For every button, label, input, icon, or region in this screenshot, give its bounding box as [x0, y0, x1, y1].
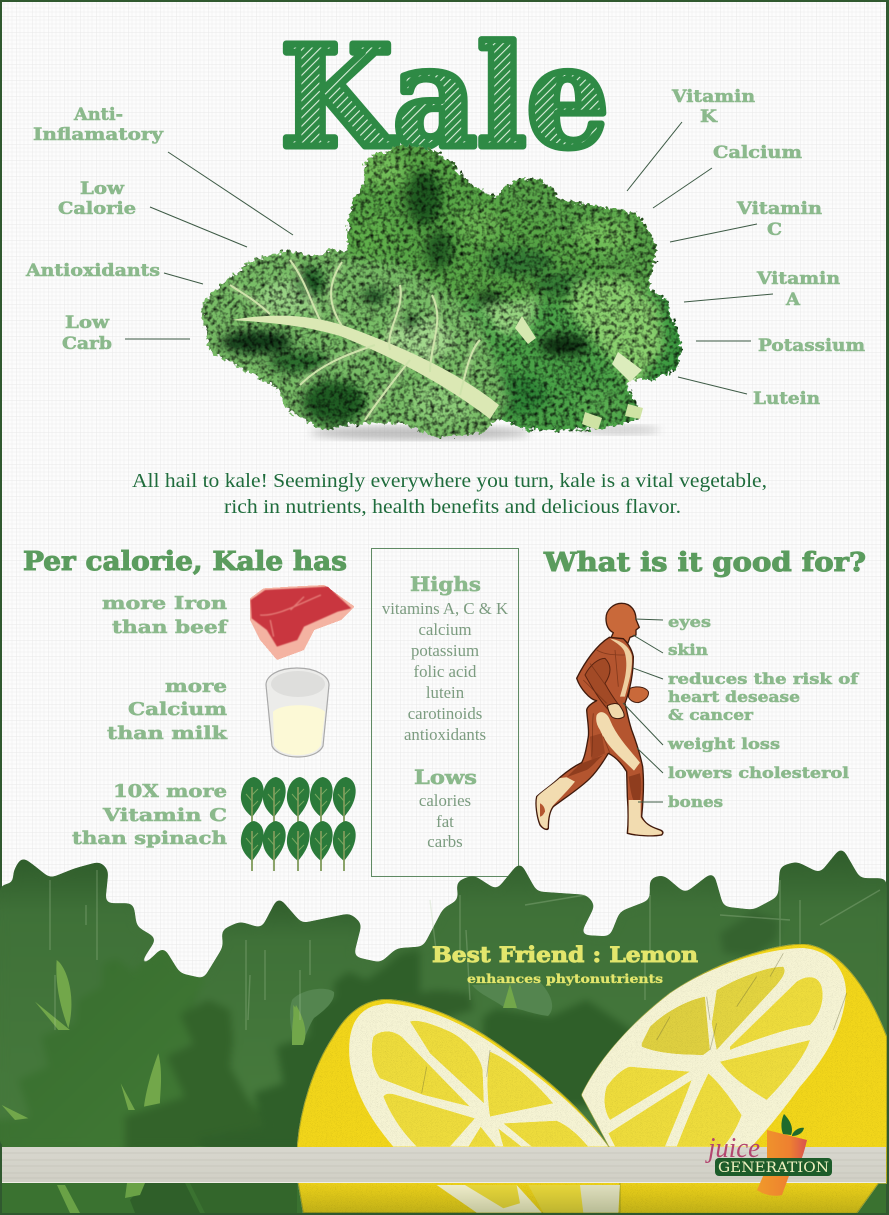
spinach comparison text: than spinach: [72, 828, 227, 849]
calcium comparison text: Calcium: [128, 699, 227, 720]
nutrient labels right of kale: A: [785, 290, 801, 310]
kale bunch illustration: [200, 145, 683, 440]
benefit labels left of kale: [25, 105, 293, 354]
spinach comparison text: 10X more: [113, 781, 227, 802]
calcium comparison text: [107, 676, 228, 744]
juice wordmark: juice: [704, 1132, 760, 1164]
nutrient labels right of kale: Vitamin: [756, 269, 840, 289]
nutrient labels right of kale: C: [767, 220, 782, 240]
benefit labels left of kale: Calorie: [58, 199, 136, 219]
nutrient labels right of kale: Potassium: [758, 336, 865, 356]
nutrient labels right of kale: Vitamin: [671, 87, 755, 107]
nutrient labels right of kale: Lutein: [753, 389, 820, 409]
callout: best friend lemon: Best Friend : Lemon: [432, 942, 698, 967]
list of highs: folic acid: [414, 662, 477, 681]
nutrient labels right of kale: K: [700, 107, 718, 127]
list of highs: vitamins A, C & K: [382, 599, 508, 618]
below-bar leaf parts: [57, 1183, 297, 1213]
right lemon half: [582, 944, 887, 1213]
leaf scratches: [50, 870, 880, 1030]
generation badge: [715, 1158, 832, 1176]
list of highs: calcium: [418, 620, 472, 639]
panel: per calorie comparison: [23, 547, 356, 871]
icon: glass of milk: [266, 668, 329, 757]
heading: Lows: Lows: [414, 765, 477, 789]
running man anatomy figure: [536, 603, 663, 836]
list of highs: antioxidants: [404, 725, 486, 744]
icon: lemon halves: [297, 944, 887, 1213]
illustrated kale leaves background: [0, 847, 887, 1213]
benefit list: skin: [668, 641, 708, 659]
list of lows: calories: [419, 791, 471, 810]
list of highs: lutein: [426, 683, 465, 702]
bottom frame: [0, 1213, 889, 1215]
grass blades: [2, 960, 517, 1120]
benefit list: bones: [668, 793, 723, 811]
lemon below shelf: [437, 1185, 620, 1213]
benefit list: [667, 613, 860, 811]
icon: beef steak: [250, 585, 355, 660]
calcium comparison text: more: [165, 676, 227, 697]
pointer lines: [623, 619, 663, 802]
shelf bar: [2, 1147, 886, 1183]
benefit labels left of kale: Antioxidants: [25, 261, 160, 281]
spinach comparison text: Vitamin C: [102, 805, 227, 826]
panel: what is it good for: [536, 548, 866, 836]
panel: highs and lows: [372, 548, 518, 876]
list of highs: potassium: [411, 641, 479, 660]
lemon shadow below shelf: [298, 1183, 878, 1213]
benefit list: lowers cholesterol: [668, 764, 849, 782]
nutrient labels right of kale: Vitamin: [736, 199, 822, 219]
intro text: rich in nutrients, health benefits and delicious flavor.: [224, 496, 681, 518]
title: Kale: Kale: [280, 16, 609, 180]
benefit list: heart desease: [668, 688, 800, 706]
calcium comparison text: than milk: [107, 723, 228, 744]
benefit labels left of kale: Low: [65, 313, 109, 333]
intro text: [132, 470, 767, 518]
benefit labels left of kale: Low: [80, 179, 124, 199]
left lemon half: [297, 999, 620, 1213]
benefit labels left of kale: Carb: [62, 334, 112, 354]
icon: cup leaves: [781, 1114, 804, 1136]
iron comparison text: than beef: [112, 617, 229, 638]
benefit labels left of kale: Inflamatory: [33, 125, 164, 145]
icon: spinach leaves: [241, 777, 356, 871]
spinach comparison text: [72, 781, 227, 849]
benefit labels left of kale: Anti-: [73, 105, 123, 125]
nutrient labels right of kale: Calcium: [713, 143, 802, 163]
heading: What is it good for?: What is it good for?: [543, 548, 866, 578]
heading: Per calorie, Kale has: Per calorie, Kale has: [23, 547, 347, 577]
benefit list: eyes: [668, 613, 711, 631]
list of lows: [419, 791, 471, 851]
iron comparison text: more Iron: [102, 593, 227, 614]
benefit list: weight loss: [667, 735, 780, 753]
list of lows: carbs: [427, 832, 463, 851]
generation wordmark: GENERATION: [718, 1160, 829, 1176]
list of highs: carotinoids: [408, 704, 482, 723]
benefit list: & cancer: [668, 706, 754, 724]
list of highs: [382, 599, 508, 744]
intro text: All hail to kale! Seemingly everywhere you turn, kale is a vital vegetable,: [132, 470, 767, 492]
heading: Highs: Highs: [410, 572, 481, 596]
nutrient labels right of kale: [627, 87, 865, 409]
icon: orange juice cup: [757, 1130, 807, 1196]
benefit list: reduces the risk of: [668, 670, 860, 688]
iron comparison text: [102, 593, 229, 638]
callout: best friend lemon: [432, 942, 698, 986]
logo: Juice Generation: [704, 1114, 832, 1196]
pale leaf tips near lemon: [290, 982, 552, 1045]
callout: best friend lemon: enhances phytonutrients: [467, 971, 663, 986]
list of lows: fat: [436, 812, 454, 831]
